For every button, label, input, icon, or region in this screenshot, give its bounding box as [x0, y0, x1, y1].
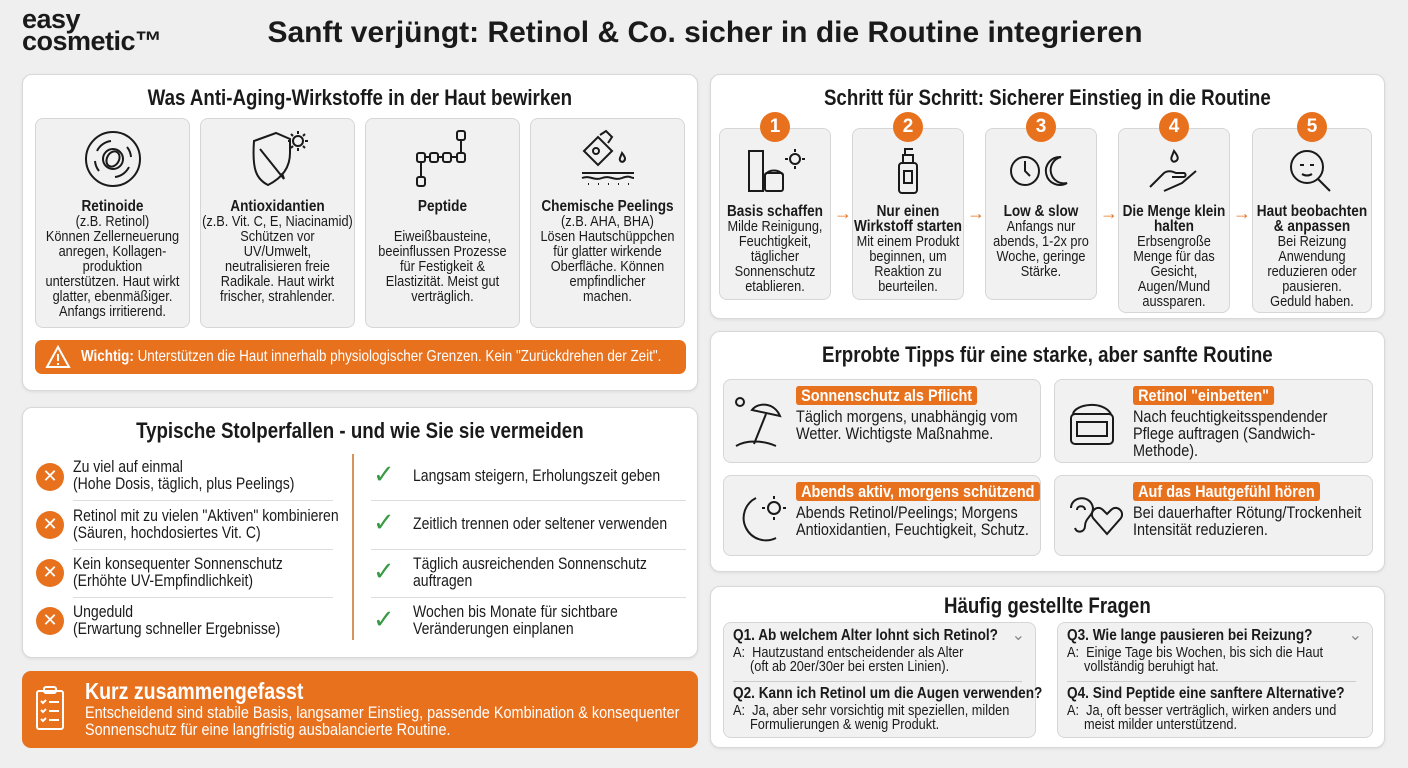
list: fehler: Kein konsequenter Sonnenschutz: [73, 555, 283, 573]
callout: wichtig: [35, 340, 686, 374]
faq left: (oft ab 20er/30er bei ersten Linien).: [750, 658, 949, 675]
list: fehler: Retinol mit zu vielen "Aktiven" kombinieren: [73, 507, 339, 525]
card: retinoide: produktion: [83, 258, 142, 275]
tip 3: Abends aktiv, morgens schützend: [801, 482, 1034, 501]
icon: moon sun: [742, 496, 786, 542]
panel: faq: [710, 586, 1385, 748]
icon: ear heart: [1070, 497, 1123, 536]
callout: wichtig: Wichtig: Unterstützen die Haut innerhalb physiologischer Grenzen. Kein "Zurückdrehen der Zeit".: [81, 348, 661, 365]
arrow: →: [1233, 203, 1251, 223]
step 4: Die Menge klein: [1123, 203, 1225, 220]
card: peptide: Elastizität. Meist gut: [386, 273, 499, 290]
tip 4: Intensität reduzieren.: [1133, 520, 1268, 539]
step 1: Milde Reinigung,: [727, 218, 822, 235]
panel: schritte: 3: [1036, 116, 1046, 137]
step 4: halten: [1154, 218, 1194, 235]
tip 2: [1054, 379, 1373, 463]
list: lösungen: Zeitlich trennen oder seltener verwenden: [413, 515, 667, 533]
step 3: Anfangs nur: [1007, 218, 1075, 235]
card: retinoide: Retinoide: [81, 198, 143, 215]
card: retinoide: Anfangs irritierend.: [59, 303, 166, 320]
faq left: Formulierungen & wenig Produkt.: [750, 716, 939, 733]
step 5: Bei Reizung: [1278, 233, 1346, 250]
step 1: etablieren.: [745, 278, 805, 295]
faq right: ⌄: [1349, 627, 1362, 644]
step 4: Menge für das: [1133, 248, 1215, 265]
faq left: Q2. Kann ich Retinol um die Augen verwenden?: [733, 685, 1042, 702]
title: Sanft verjüngt: Retinol & Co. sicher in die Routine integrieren: [267, 16, 1143, 49]
step 3: Low & slow: [1004, 203, 1078, 220]
list: fehler: ✕: [42, 514, 58, 535]
icon: hand drop: [1149, 149, 1197, 192]
list: fehler: Zu viel auf einmal: [73, 458, 183, 476]
icon: jar: [1070, 404, 1114, 445]
panel: schritte: [710, 74, 1385, 319]
heading: Typische Stolperfallen - und wie Sie sie vermeiden: [136, 418, 584, 443]
logo: [22, 4, 162, 56]
step 1: täglicher: [751, 248, 799, 265]
step 1: [719, 128, 831, 300]
card: antioxidantien: frischer, strahlender.: [220, 288, 335, 305]
step 1: Basis schaffen: [727, 203, 823, 220]
card: peptide: für Festigkeit &: [400, 258, 485, 275]
card: peptide: [365, 118, 520, 328]
icon: umbrella: [735, 397, 782, 447]
icon: bottle drops: [582, 130, 634, 185]
list: lösungen: ✓: [373, 508, 395, 538]
faq right: A: Ja, oft besser verträglich, wirken anders und: [1067, 702, 1336, 719]
faq left: A: Hautzustand entscheidender als Alter: [733, 644, 963, 661]
card: peptide: Peptide: [418, 198, 467, 215]
arrow: →: [834, 203, 852, 223]
step 4: Gesicht,: [1151, 263, 1197, 280]
icon: warning: [45, 345, 71, 368]
heading: Erprobte Tipps für eine starke, aber sanfte Routine: [822, 342, 1273, 367]
panel: tipps: [710, 331, 1385, 572]
icon: shield sun: [252, 131, 308, 186]
card: antioxidantien: Radikale. Haut wirkt: [221, 273, 334, 290]
step 2: Wirkstoff starten: [854, 218, 962, 235]
panel: schritte: 2: [903, 116, 913, 137]
card: peelings: Oberfläche. Können: [551, 258, 664, 275]
heading: Schritt für Schritt: Sicherer Einstieg in die Routine: [824, 85, 1271, 110]
heading: Was Anti-Aging-Wirkstoffe in der Haut bewirken: [148, 85, 572, 110]
list: lösungen: auftragen: [413, 572, 472, 590]
step 2: Nur einen: [877, 203, 939, 220]
card: peelings: (z.B. AHA, BHA): [561, 213, 654, 230]
faq right: Q4. Sind Peptide eine sanftere Alternative?: [1067, 685, 1345, 702]
card: peptide: Eiweißbausteine,: [394, 228, 491, 245]
list: fehler: (Hohe Dosis, täglich, plus Peelings): [73, 475, 294, 493]
tip 2: Retinol "einbetten": [1138, 386, 1269, 405]
step 2: beurteilen.: [878, 278, 938, 295]
card: antioxidantien: Schützen vor: [240, 228, 315, 245]
list: lösungen: Wochen bis Monate für sichtbare: [413, 603, 618, 621]
tip 3: [723, 475, 1041, 556]
list: fehler: Ungeduld: [73, 603, 133, 621]
icon: serum: [898, 148, 918, 194]
tip 1: Täglich morgens, unabhängig vom: [796, 407, 1018, 426]
panel: schritte: 5: [1307, 116, 1317, 137]
list: lösungen: [371, 460, 686, 638]
step 3: Stärke.: [1021, 263, 1061, 280]
logo: easy: [22, 4, 80, 34]
step 4: aussparen.: [1142, 293, 1206, 310]
step 5: Anwendung: [1278, 248, 1346, 265]
step 5: & anpassen: [1274, 218, 1350, 235]
card: peelings: machen.: [583, 288, 632, 305]
summary box: [22, 671, 698, 748]
card: peptide: verträglich.: [411, 288, 474, 305]
tip 1: Sonnenschutz als Pflicht: [801, 386, 972, 405]
card: peelings: Chemische Peelings: [541, 198, 674, 215]
step 1: Feuchtigkeit,: [739, 233, 811, 250]
card: retinoide: [35, 118, 190, 328]
step 5: Geduld haben.: [1270, 293, 1354, 310]
step 2: [852, 128, 964, 300]
step 5: Haut beobachten: [1257, 203, 1367, 220]
tip 3: Abends Retinol/Peelings; Morgens: [796, 503, 1018, 522]
panel: stolperfallen: [22, 407, 698, 658]
icon: clipboard: [36, 686, 64, 730]
list: fehler: (Erhöhte UV-Empfindlichkeit): [73, 572, 253, 590]
summary box: Sonnenschutz für eine langfristig ausbalancierte Routine.: [85, 720, 450, 739]
step 2: Reaktion zu: [874, 263, 942, 280]
step 4: [1118, 128, 1230, 313]
list: lösungen: Täglich ausreichenden Sonnenschutz: [413, 555, 647, 573]
card: retinoide: Können Zellerneuerung anregen, Kollagen-: [46, 228, 179, 260]
list: lösungen: ✓: [373, 460, 395, 490]
list: lösungen: ✓: [373, 557, 395, 587]
step 5: reduzieren oder: [1267, 263, 1357, 280]
card: antioxidantien: neutralisieren freie: [225, 258, 330, 275]
step 4: Augen/Mund: [1138, 278, 1210, 295]
card: retinoide: unterstützen. Haut wirkt glatter, ebenmäßiger.: [45, 273, 179, 305]
tip 4: Bei dauerhafter Rötung/Trockenheit: [1133, 503, 1361, 522]
tip 2: Nach feuchtigkeitsspendender: [1133, 407, 1327, 426]
faq right: vollständig beruhigt hat.: [1084, 658, 1219, 675]
faq left: ⌄: [1012, 627, 1025, 644]
icon: cycle: [85, 131, 141, 187]
step 4: Erbsengroße: [1137, 233, 1211, 250]
step 5: pausieren.: [1282, 278, 1342, 295]
faq right: meist milder unterstützend.: [1084, 716, 1237, 733]
icon: peptide chain: [416, 130, 466, 187]
card: retinoide: (z.B. Retinol): [76, 213, 149, 230]
tip 4: [1054, 475, 1373, 556]
arrow: →: [1100, 203, 1118, 223]
list: fehler: (Säuren, hochdosiertes Vit. C): [73, 524, 261, 542]
card: peelings: [530, 118, 685, 328]
list: lösungen: ✓: [373, 605, 395, 635]
list: fehler: ✕: [42, 610, 58, 631]
step 1: Sonnenschutz: [735, 263, 815, 280]
tip 2: Methode).: [1133, 441, 1198, 460]
card: antioxidantien: [200, 118, 355, 328]
icon: products: [748, 149, 805, 192]
list: fehler: ✕: [42, 562, 58, 583]
panel: schritte: 4: [1169, 116, 1179, 137]
tip 1: [723, 379, 1041, 463]
step 3: [985, 128, 1097, 300]
heading: Häufig gestellte Fragen: [944, 593, 1151, 618]
faq right: [1057, 622, 1373, 738]
tip 4: Auf das Hautgefühl hören: [1138, 482, 1315, 501]
faq left: A: Ja, aber sehr vorsichtig mit speziellen, milden: [733, 702, 1009, 719]
card: peelings: für glatter wirkende: [553, 243, 662, 260]
list: lösungen: Veränderungen einplanen: [413, 620, 574, 638]
list: fehler: (Erwartung schneller Ergebnisse): [73, 620, 280, 638]
panel: wirkstoffe: [22, 74, 698, 391]
card: antioxidantien: UV/Umwelt,: [244, 243, 311, 260]
list: fehler: [36, 458, 339, 638]
faq left: Q1. Ab welchem Alter lohnt sich Retinol?: [733, 627, 998, 644]
faq right: A: Einige Tage bis Wochen, bis sich die Haut: [1067, 644, 1323, 661]
card: peelings: empfindlicher: [570, 273, 645, 290]
icon: clock moon: [1010, 156, 1068, 186]
summary box: Kurz zusammengefasst: [85, 678, 303, 704]
faq left: [723, 622, 1036, 738]
card: antioxidantien: (z.B. Vit. C, E, Niacinamid): [202, 213, 353, 230]
tip 2: Pflege auftragen (Sandwich-: [1133, 424, 1315, 443]
card: peelings: Lösen Hautschüppchen: [540, 228, 674, 245]
list: lösungen: Langsam steigern, Erholungszeit geben: [413, 467, 660, 485]
icon: magnifier face: [1290, 150, 1331, 192]
step 3: abends, 1-2x pro: [993, 233, 1089, 250]
step 3: Woche, geringe: [996, 248, 1086, 265]
step 2: beginnen, um: [869, 248, 947, 265]
list: fehler: ✕: [42, 466, 58, 487]
arrow: →: [967, 203, 985, 223]
step 2: Mit einem Produkt: [857, 233, 959, 250]
panel: schritte: 1: [770, 116, 780, 137]
tip 1: Wetter. Wichtigste Maßnahme.: [796, 424, 993, 443]
faq right: Q3. Wie lange pausieren bei Reizung?: [1067, 627, 1312, 644]
card: peptide: beeinflussen Prozesse: [378, 243, 507, 260]
card: antioxidantien: Antioxidantien: [230, 198, 325, 215]
logo: cosmetic™: [22, 26, 162, 56]
tip 3: Antioxidantien, Feuchtigkeit, Schutz.: [796, 520, 1029, 539]
step 5: [1252, 128, 1372, 313]
summary box: Entscheidend sind stabile Basis, langsamer Einstieg, passende Kombination & konsequenter: [85, 703, 679, 722]
